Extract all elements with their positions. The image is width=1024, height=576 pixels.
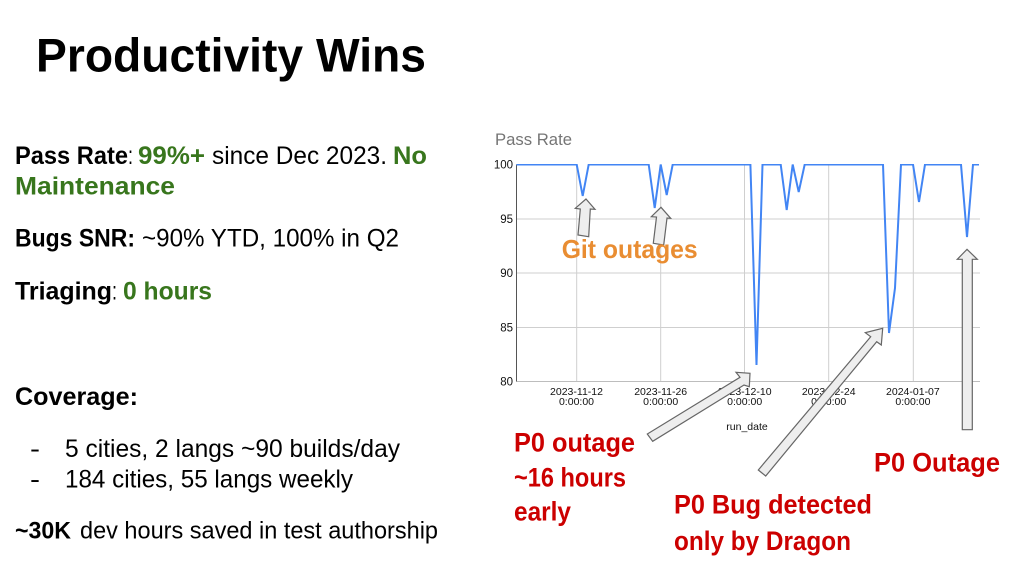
list: coverage items: -: [30, 435, 40, 463]
text block: pass rate: since Dec 2023.: [212, 142, 387, 170]
data line: [516, 164, 979, 365]
x axis labels: 0:00:00: [895, 396, 931, 408]
x axis labels: 2024-01-07: [886, 386, 940, 398]
callout: P0 outage 16 hours early: P0 outage: [514, 428, 635, 458]
callout: P0 outage 16 hours early: ~16 hours: [514, 462, 626, 492]
title: Productivity Wins: [36, 28, 426, 82]
x axis labels: 2023-12-10: [718, 386, 772, 398]
y axis labels: 80: [500, 376, 513, 388]
list: coverage items: -: [30, 466, 40, 494]
text block: pass rate: 99%+: [138, 142, 205, 170]
x axis title: run_date: [726, 421, 768, 433]
text block: bugs SNR: ~90% YTD, 100% in Q2: [142, 224, 399, 252]
text block: pass rate: [15, 142, 427, 200]
callout: P0 bug detected only by Dragon: [674, 490, 872, 556]
x axis labels: [550, 386, 940, 408]
text block: pass rate: :: [128, 142, 133, 170]
x axis labels: 0:00:00: [559, 396, 594, 408]
y axis labels: [494, 160, 513, 388]
text block: triaging: [15, 278, 212, 306]
x axis labels: 2023-11-12: [550, 386, 603, 398]
list: coverage items: 5 cities, 2 langs ~90 builds/day: [65, 435, 400, 463]
text block: bugs SNR: Bugs SNR:: [15, 224, 135, 252]
y axis labels: 85: [500, 322, 513, 334]
arrow: first git outage: [575, 199, 595, 237]
chart title: Pass Rate: [495, 130, 572, 149]
text block: pass rate: Maintenance: [15, 172, 175, 200]
x axis labels: 0:00:00: [727, 396, 762, 408]
text block: triaging: 0 hours: [123, 278, 212, 306]
x axis labels: 0:00:00: [811, 396, 846, 408]
text block: bugs SNR: [15, 224, 399, 252]
callout: P0 outage 16 hours early: [514, 428, 635, 526]
x axis labels: 2023-11-26: [634, 386, 687, 398]
heading: coverage: Coverage:: [15, 383, 138, 411]
text block: pass rate: No: [393, 142, 427, 170]
callout: P0 bug detected only by Dragon: only by Dragon: [674, 526, 851, 556]
callout: P0 outage 16 hours early: early: [514, 496, 571, 526]
list: coverage items: [30, 435, 400, 494]
arrow: P0 bug: [758, 328, 883, 476]
arrow: P0 outage right: [957, 249, 977, 430]
text block: pass rate: Pass Rate: [15, 142, 128, 170]
list: coverage items: 184 cities, 55 langs weekly: [65, 466, 353, 494]
y axis labels: 95: [500, 214, 513, 226]
y axis labels: 100: [494, 160, 513, 172]
callout: P0 bug detected only by Dragon: P0 Bug detected: [674, 490, 872, 520]
callout: git outages: Git outages: [562, 234, 698, 264]
text block: dev hours saved: ~30K: [15, 518, 72, 544]
y axis labels: 90: [500, 268, 513, 280]
text block: triaging: :: [112, 278, 117, 306]
x axis labels: 2023-12-24: [802, 386, 856, 398]
text block: dev hours saved: dev hours saved in test authorship: [80, 518, 438, 544]
chart: pass rate line chart: [494, 130, 980, 433]
arrow: P0 outage: [647, 372, 750, 441]
arrow: second git outage: [651, 207, 671, 245]
callout: P0 outage: P0 Outage: [874, 448, 1000, 478]
text block: triaging: Triaging: [15, 278, 112, 306]
x axis labels: 0:00:00: [643, 396, 678, 408]
